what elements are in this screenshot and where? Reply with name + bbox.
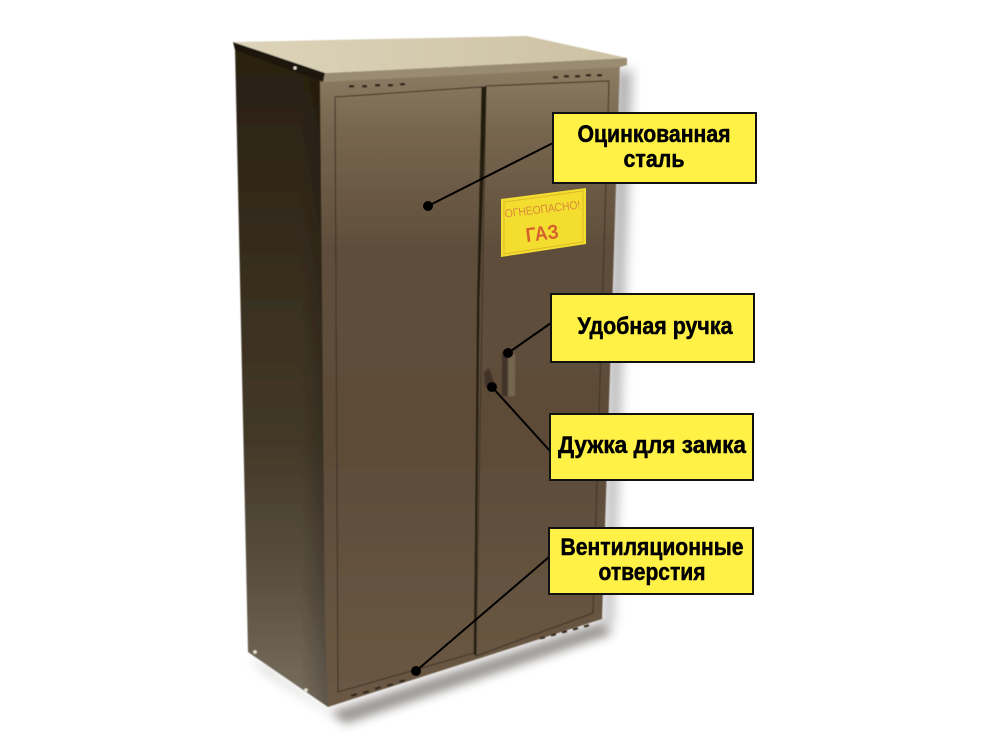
leader: lock hasp [487, 382, 550, 451]
rivets [253, 66, 308, 692]
right door [476, 81, 609, 656]
lock hasp [484, 368, 494, 392]
leader: vents [411, 557, 549, 676]
roof top [233, 36, 627, 73]
bottom vent slots [351, 624, 589, 697]
roof lip [323, 58, 627, 82]
callout: lock hasp: Дужка для замка [558, 432, 747, 459]
leader: handle [503, 323, 551, 358]
cast shadow [250, 70, 632, 724]
callout: galvanized steel [553, 113, 756, 183]
side panel [235, 46, 328, 707]
top vent slots [349, 74, 602, 88]
cabinet photo [233, 36, 632, 724]
callout: handle [551, 294, 754, 362]
cabinet body [233, 36, 627, 707]
door gap [474, 86, 486, 655]
callout: lock hasp [550, 414, 753, 480]
sign text: gas: ГАЗ [525, 221, 560, 247]
handle [502, 352, 515, 396]
front frame [320, 62, 620, 707]
sign text: warning: ОГНЕОПАСНО! [504, 199, 581, 221]
side roof edge [233, 42, 325, 82]
callout: vents: Вентиляционные [560, 534, 744, 561]
left door [335, 87, 482, 692]
warning sign [501, 188, 586, 257]
callout: handle: Удобная ручка [578, 313, 733, 340]
callout: galvanized steel: сталь [624, 146, 684, 173]
leader: galvanized steel [423, 143, 553, 211]
callout: vents [549, 528, 753, 594]
callout: vents: отверстия [598, 559, 706, 586]
callout: galvanized steel: Оцинкованная [578, 121, 730, 148]
